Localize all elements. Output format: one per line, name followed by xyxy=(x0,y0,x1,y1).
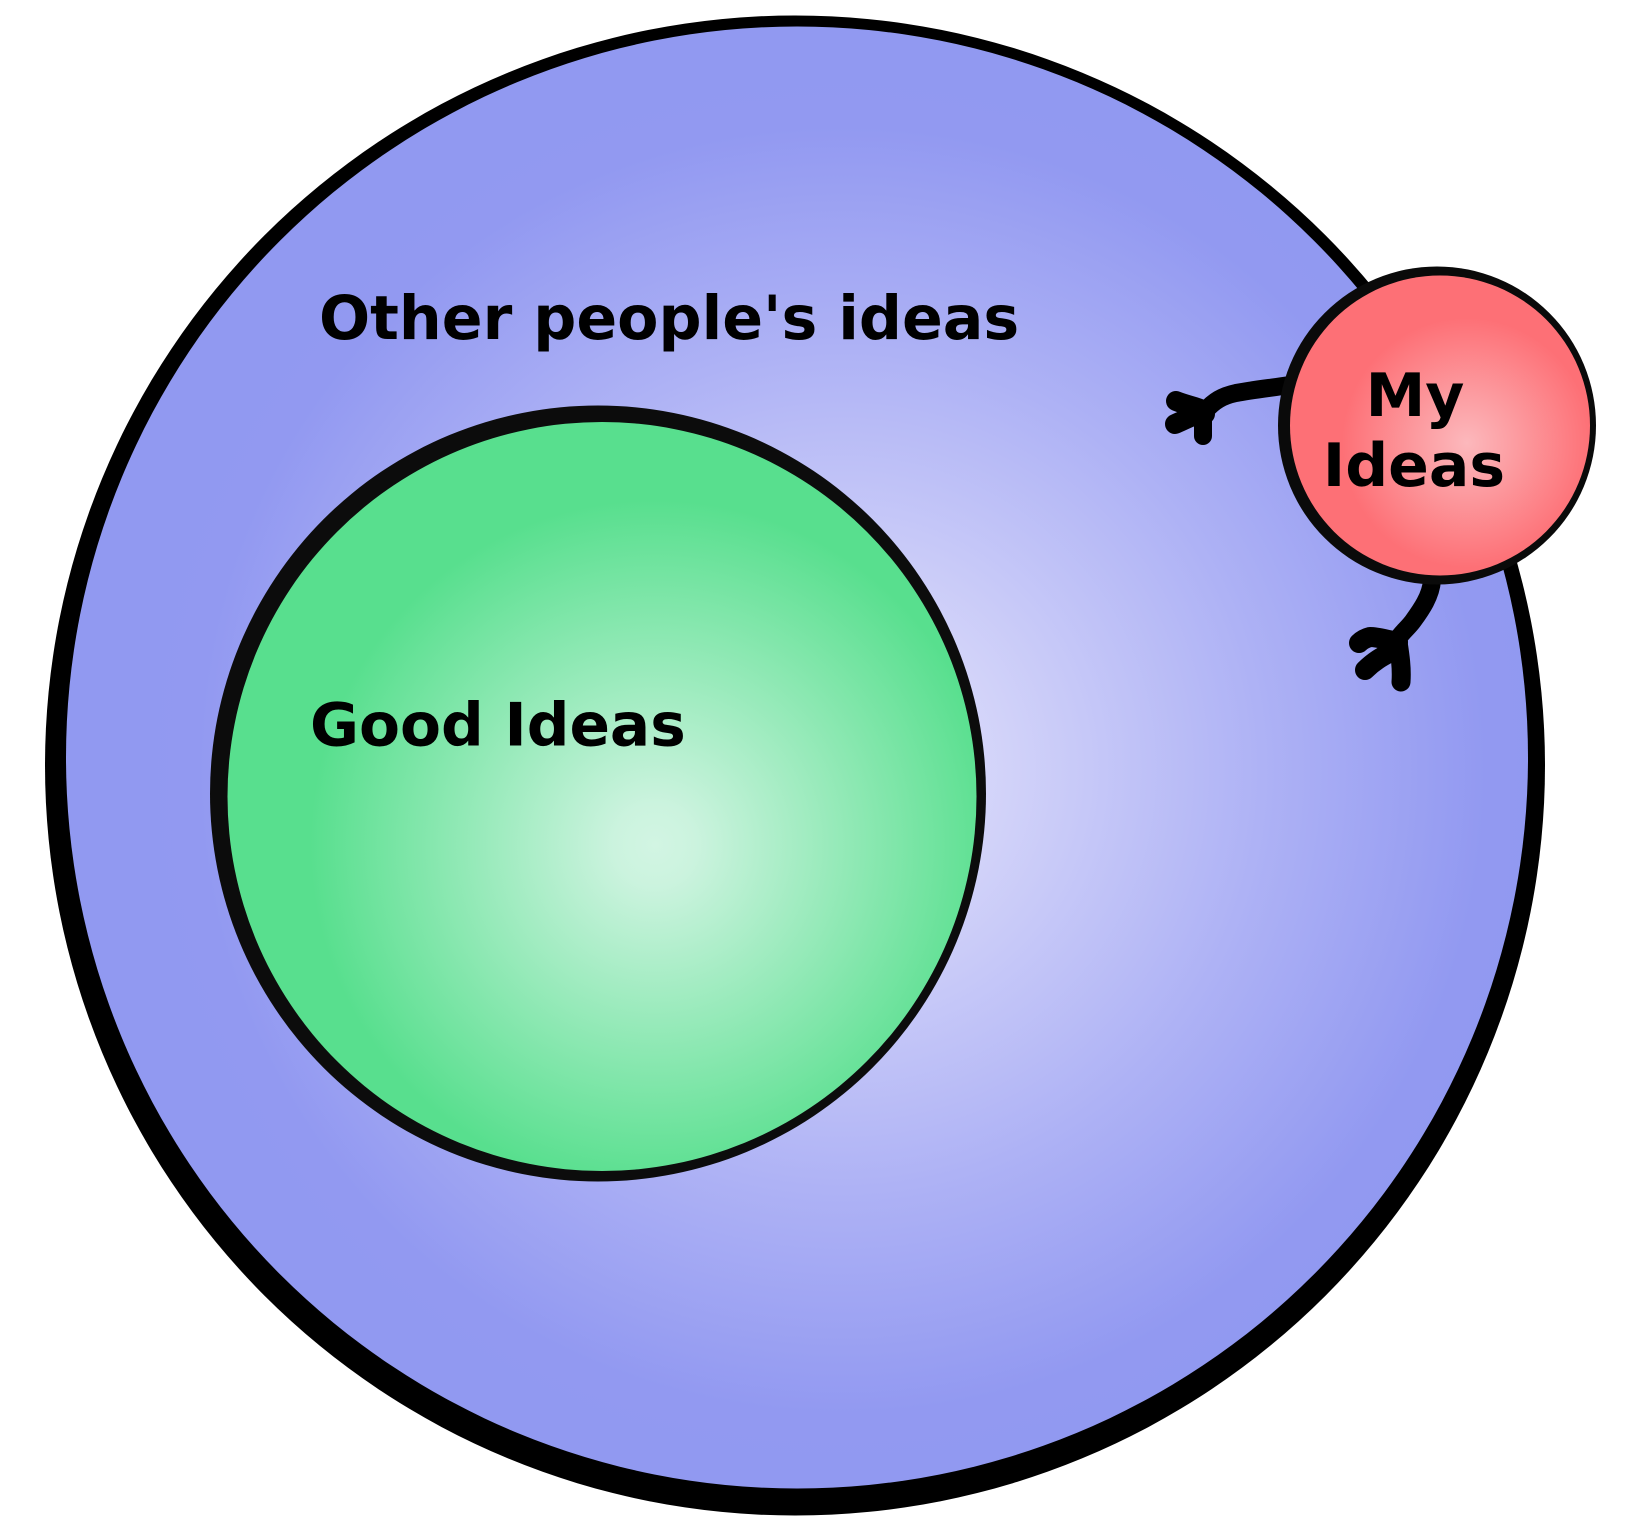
panel: good ideas circle xyxy=(210,406,986,1182)
icon: left arm with hand xyxy=(1175,385,1290,436)
icon: lower arm with hand xyxy=(1359,580,1432,682)
text: my ideas label xyxy=(1323,361,1505,501)
text: my ideas label: Ideas xyxy=(1323,431,1505,501)
heading: good ideas: Good Ideas xyxy=(310,692,686,760)
heading: other people's ideas: Other people's ideas xyxy=(319,284,1019,354)
text: my ideas label: My xyxy=(1366,361,1464,431)
panel: my ideas circle xyxy=(1278,266,1596,584)
